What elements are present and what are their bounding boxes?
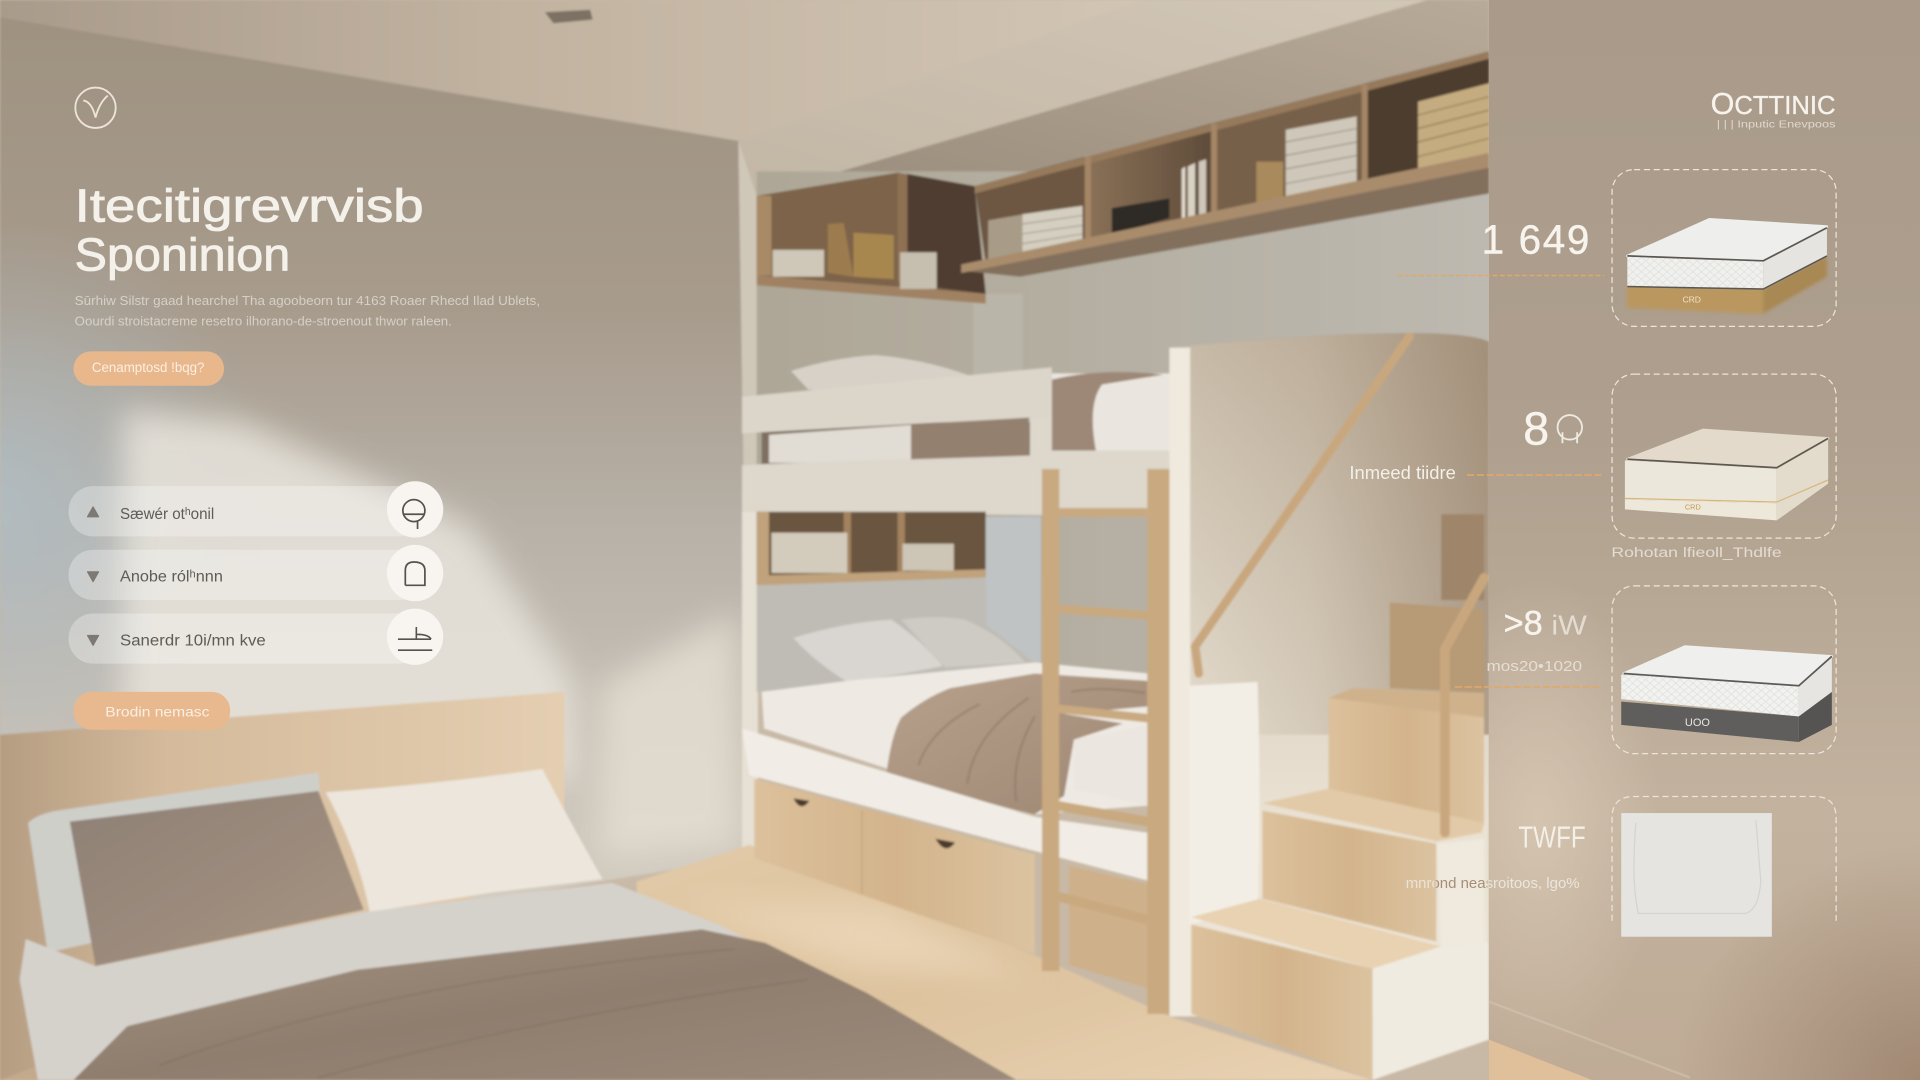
floor and wood backdrop — [0, 845, 1373, 1080]
stat 4: mnrond neasroitoos, lgo% — [1406, 876, 1580, 892]
description: Oourdi stroistacreme resetro ilhorano-de-stroenout thwor raleen. — [75, 314, 452, 329]
stat 3: >8 — [1504, 604, 1543, 642]
stair wall — [1169, 333, 1489, 1016]
storage drawers — [754, 779, 1147, 988]
upper bunk bedding — [762, 355, 1172, 467]
handrails — [1195, 337, 1484, 833]
staircase — [1191, 514, 1489, 1080]
feature row 2: Anobe rólʰnnn — [120, 569, 223, 586]
brand logo: OCTTINIC — [1711, 87, 1836, 121]
stat 1: 1 649 — [1482, 216, 1589, 262]
upper bunk frame — [742, 367, 1172, 517]
button: bottom: Brodin nemasc — [105, 703, 209, 719]
foreground white pillow — [326, 769, 602, 912]
room background scene — [0, 0, 1489, 1080]
stat 3: iW — [1551, 609, 1587, 640]
card 2: mattress — [1612, 374, 1836, 538]
bunk left post — [742, 512, 758, 849]
alcove back wall — [757, 171, 1489, 686]
ceiling — [0, 0, 1142, 141]
foreground bed sheet — [20, 883, 1016, 1080]
bunk ladder — [1042, 469, 1169, 1014]
card 3: mattress — [1612, 586, 1836, 754]
lower bunk mattress — [762, 662, 1147, 814]
right wall panel — [1489, 0, 1920, 1080]
left wall — [0, 17, 749, 980]
foreground duvet — [73, 929, 1016, 1080]
feature row 2 — [69, 545, 443, 601]
recessed ceiling light — [545, 10, 593, 23]
foreground white back pillow — [28, 773, 321, 953]
card 3: mattress: UOO — [1685, 717, 1710, 729]
card 1: mattress — [1612, 170, 1836, 326]
logo emblem — [75, 88, 116, 128]
button: bottom — [73, 692, 230, 730]
card 2: mattress: CRD — [1685, 502, 1701, 511]
button: top — [73, 351, 224, 386]
description — [75, 293, 540, 329]
stat 3 — [1455, 604, 1599, 687]
card 1: mattress: CRD — [1682, 294, 1701, 304]
title: Itecitigrevrvisb — [75, 180, 424, 232]
lower bunk wall — [757, 576, 1041, 692]
foreground headboard — [0, 692, 564, 1080]
feature row 1: Sæwér otʰonil — [120, 506, 214, 523]
stat 2 — [1349, 402, 1604, 483]
lower bunk pillows — [793, 617, 1025, 682]
alcove soffit — [757, 0, 1489, 196]
card 2 caption: Rohotan lfieoll_Thdlfe — [1611, 545, 1782, 560]
stat 2: 8 — [1523, 402, 1549, 454]
wall sunlight — [0, 220, 737, 857]
button: top: Cenamptosd !bqg? — [92, 360, 204, 375]
foreground brown pillow — [70, 791, 364, 966]
stat 4: TWFF — [1518, 820, 1586, 854]
left upper shelf — [757, 173, 986, 304]
description: Sūrhiw Silstr gaad hearchel Tha agoobeorn tur 4163 Roaer Rhecd Ilad Ublets, — [75, 293, 540, 308]
lower bunk duvet — [887, 673, 1147, 814]
stat 2: Inmeed tiidre — [1349, 462, 1456, 483]
lower bunk base — [742, 729, 1147, 880]
card 4: fabric swatch — [1612, 797, 1836, 937]
feature row 3: Sanerdr 10i/mn kve — [120, 632, 266, 649]
stat 3: mos20•1020 — [1487, 659, 1582, 675]
stat 4 — [1406, 820, 1586, 892]
title: Sponinion — [75, 229, 290, 281]
right upper shelves — [961, 51, 1489, 277]
lower shelf — [757, 512, 986, 585]
feature row 3 — [69, 609, 443, 665]
title — [75, 180, 424, 281]
brand logo: | | | Inputic Enevpoos — [1717, 119, 1836, 130]
feature row 1 — [69, 481, 443, 538]
feature list — [69, 481, 443, 665]
wall band above alcove — [738, 0, 1428, 201]
